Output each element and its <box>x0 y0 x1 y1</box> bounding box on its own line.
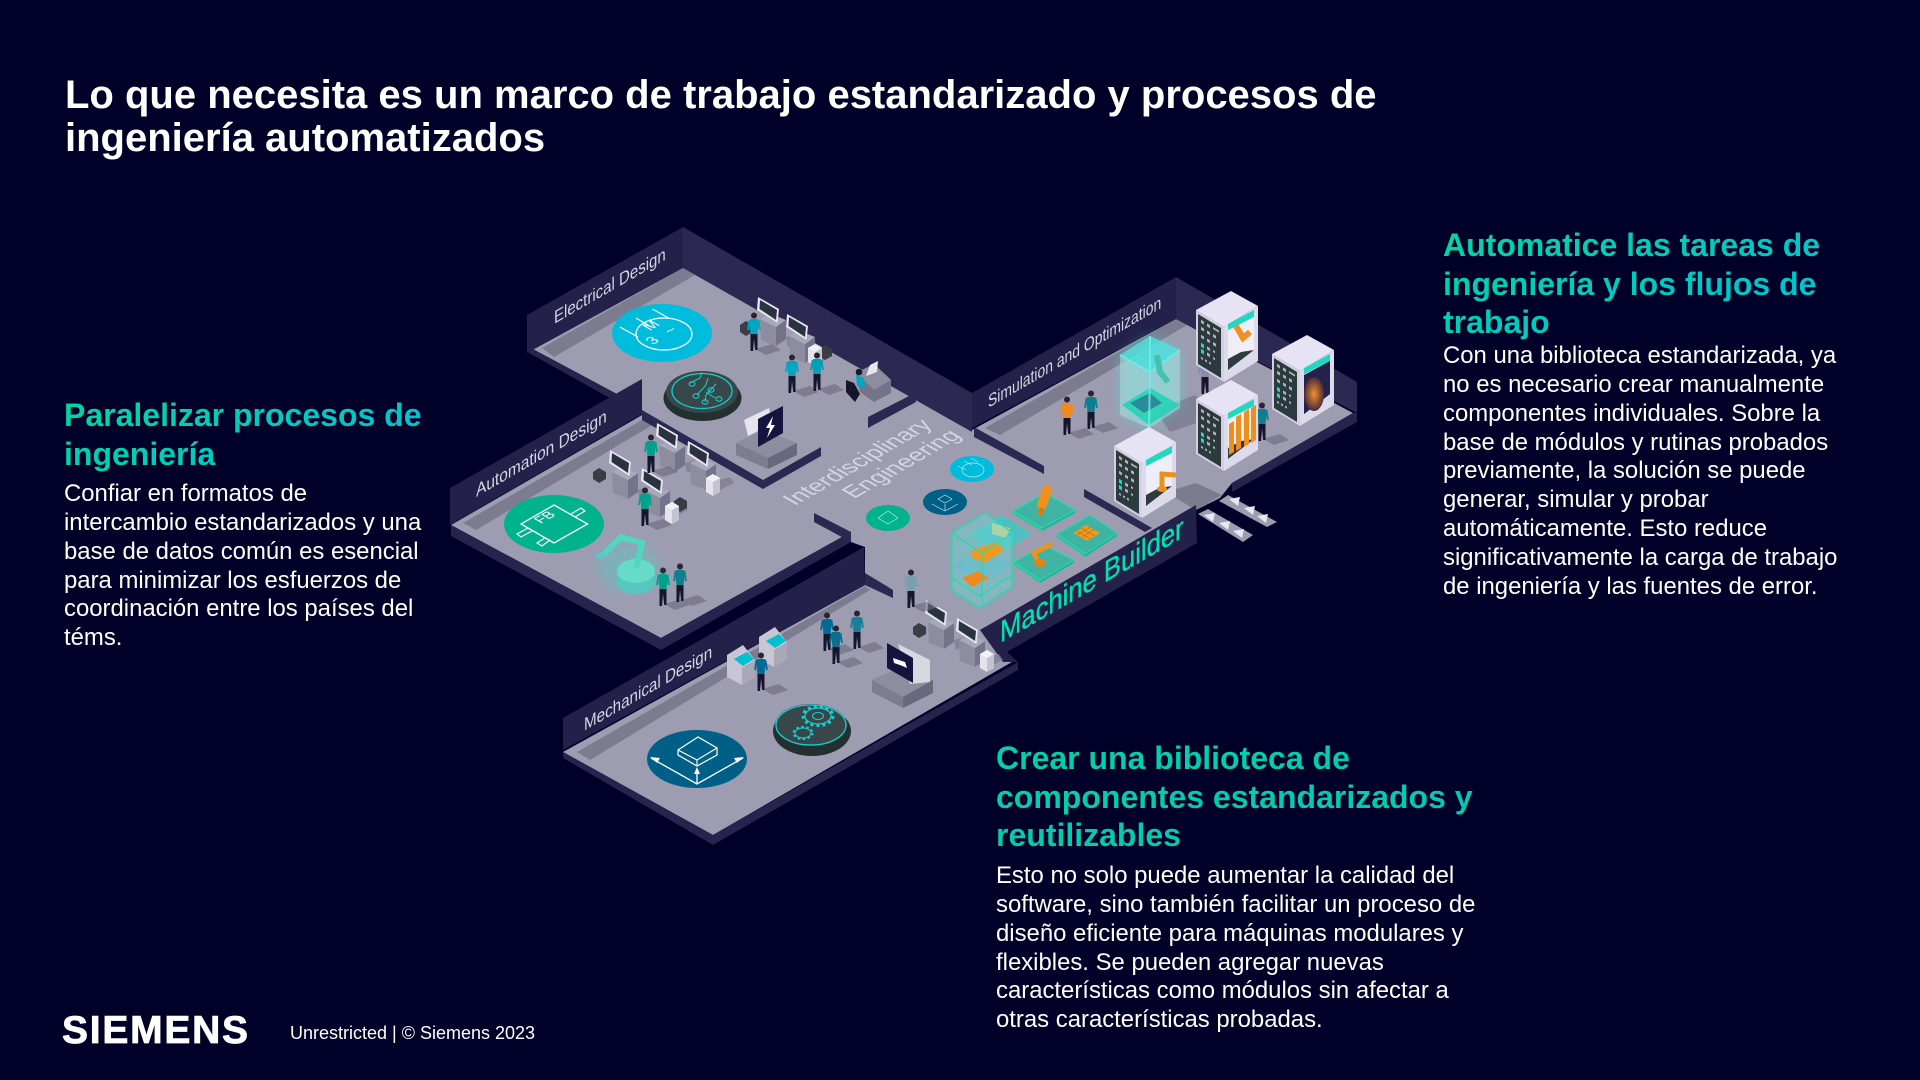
text: paralelizar procesos: Confiar en formatos de <box>64 480 307 507</box>
cabinet: pillars cell <box>1196 380 1258 471</box>
text: automatice las tareas: previamente, la solución se puede <box>1443 457 1806 484</box>
kiosks mechanical <box>727 627 787 685</box>
machine tile: arm <box>1014 544 1074 583</box>
mechanical team <box>755 570 938 695</box>
text: paralelizar procesos: téms. <box>64 624 122 651</box>
text: crear una biblioteca: Esto no solo puede aumentar la calidad del <box>996 862 1454 889</box>
wall: room divider electrical automation <box>642 393 916 489</box>
heading: automatice las tareas: Automatice las tareas de <box>1443 227 1820 263</box>
wall: electrical design <box>527 227 972 432</box>
heading: automatice las tareas: trabajo <box>1443 304 1550 340</box>
text: crear una biblioteca: características como módulos sin afectar a <box>996 977 1449 1004</box>
icon: mechanical floor disc <box>647 730 747 788</box>
electrical team <box>748 312 844 397</box>
text: paralelizar procesos: intercambio estandarizados y una <box>64 509 421 536</box>
cabinet: glow cell <box>1272 335 1334 426</box>
footer note: Unrestricted | © Siemens 2023 <box>290 1023 535 1043</box>
icon: function block floor disc <box>504 495 604 553</box>
text: crear una biblioteca: flexibles. Se pueden agregar nuevas <box>996 949 1384 976</box>
heading: paralelizar procesos: ingeniería <box>64 436 215 472</box>
engineer behind cabinet <box>1256 402 1289 445</box>
cabinet: robot cell front <box>1114 427 1176 518</box>
electrical workstations <box>740 297 833 366</box>
heading: automatice las tareas: ingeniería y los flujos de <box>1443 266 1816 302</box>
mechanical station with robot panel <box>872 643 933 708</box>
mechanical workstations <box>913 600 1003 672</box>
robot hologram <box>596 537 658 594</box>
logo: Siemens: SIEMENS <box>62 1009 248 1052</box>
wall: simulation and optimization <box>972 277 1357 474</box>
text: automatice las tareas <box>1443 342 1837 600</box>
text: automatice las tareas: automáticamente. Esto reduce <box>1443 515 1767 542</box>
heading: automatice las tareas <box>1443 226 1820 342</box>
title: ingeniería automatizados <box>65 116 545 160</box>
heading: paralelizar procesos: Paralelizar procesos de <box>64 397 422 433</box>
wall: simulation and optimization: Simulation and Optimization <box>988 292 1161 412</box>
text: paralelizar procesos <box>64 480 422 651</box>
simulation team <box>1061 356 1232 439</box>
icon: motor floor disc: ~ <box>660 324 682 337</box>
text: automatice las tareas: de ingeniería y las fuentes de error. <box>1443 573 1818 600</box>
icon: motor floor disc: 3 <box>642 334 664 347</box>
icon: small function block disc <box>866 505 910 531</box>
floor label: interdisciplinary engineering: Engineering <box>836 426 967 502</box>
text: paralelizar procesos: coordinación entre los países del <box>64 595 413 622</box>
glowing glass cube simulation <box>1120 336 1180 428</box>
machine tile: robot <box>1013 490 1075 531</box>
text: automatice las tareas: Con una biblioteca estandarizada, ya <box>1443 342 1836 369</box>
title <box>65 73 1377 160</box>
heading: crear una biblioteca <box>996 739 1473 855</box>
icon: gear disc <box>773 704 851 756</box>
machine tile: rear <box>970 516 1031 552</box>
wall: mechanical design <box>563 547 893 750</box>
floor plan <box>451 265 1357 845</box>
electrical station with lightning panel <box>736 406 797 469</box>
heading: paralelizar procesos <box>64 396 422 473</box>
wall: mechanical design: Mechanical Design <box>584 641 712 735</box>
machine tile: pallet <box>1057 515 1117 557</box>
icon: function block floor disc: FB <box>530 509 559 526</box>
heading: crear una biblioteca: reutilizables <box>996 817 1181 853</box>
automation workstations <box>593 423 734 524</box>
automation team <box>639 434 707 610</box>
wall: machine builder: Machine Builder <box>1000 511 1184 650</box>
floor label: interdisciplinary engineering: Interdisciplinary <box>777 415 939 509</box>
text: automatice las tareas: componentes individuales. Sobre la <box>1443 400 1820 427</box>
glass cube machine builder <box>952 513 1013 608</box>
icon: circuit disc <box>664 371 742 421</box>
icon: small mechanical disc <box>923 489 967 515</box>
text: automatice las tareas: generar, simular y probar <box>1443 486 1709 513</box>
text: paralelizar procesos: base de datos común es esencial <box>64 538 419 565</box>
floor direction arrows <box>1198 495 1277 542</box>
heading: crear una biblioteca: componentes estandarizados y <box>996 779 1473 815</box>
text: paralelizar procesos: para minimizar los esfuerzos de <box>64 567 401 594</box>
wall: machine builder <box>980 489 1197 662</box>
text: automatice las tareas: no es necesario crear manualmente <box>1443 371 1824 398</box>
icon: small motor disc <box>950 456 994 482</box>
text: crear una biblioteca: otras características probadas. <box>996 1006 1323 1033</box>
title: Lo que necesita es un marco de trabajo estandarizado y procesos de <box>65 73 1377 117</box>
heading: crear una biblioteca: Crear una biblioteca de <box>996 740 1350 776</box>
wall: automation design <box>450 379 851 542</box>
desk with seated engineer <box>846 361 891 402</box>
text: crear una biblioteca: diseño eficiente para máquinas modulares y <box>996 920 1463 947</box>
cabinet: robot cell rear <box>1196 291 1258 382</box>
text: crear una biblioteca <box>996 862 1475 1033</box>
wall: automation design: Automation Design <box>476 405 607 501</box>
icon: motor floor disc <box>612 304 712 362</box>
text: crear una biblioteca: software, sino también facilitar un proceso de <box>996 891 1475 918</box>
icon: motor floor disc: M <box>639 318 664 333</box>
wall: electrical design: Electrical Design <box>554 243 666 328</box>
text: automatice las tareas: base de módulos y rutinas probados <box>1443 429 1828 456</box>
text: automatice las tareas: significativamente la carga de trabajo <box>1443 544 1837 571</box>
